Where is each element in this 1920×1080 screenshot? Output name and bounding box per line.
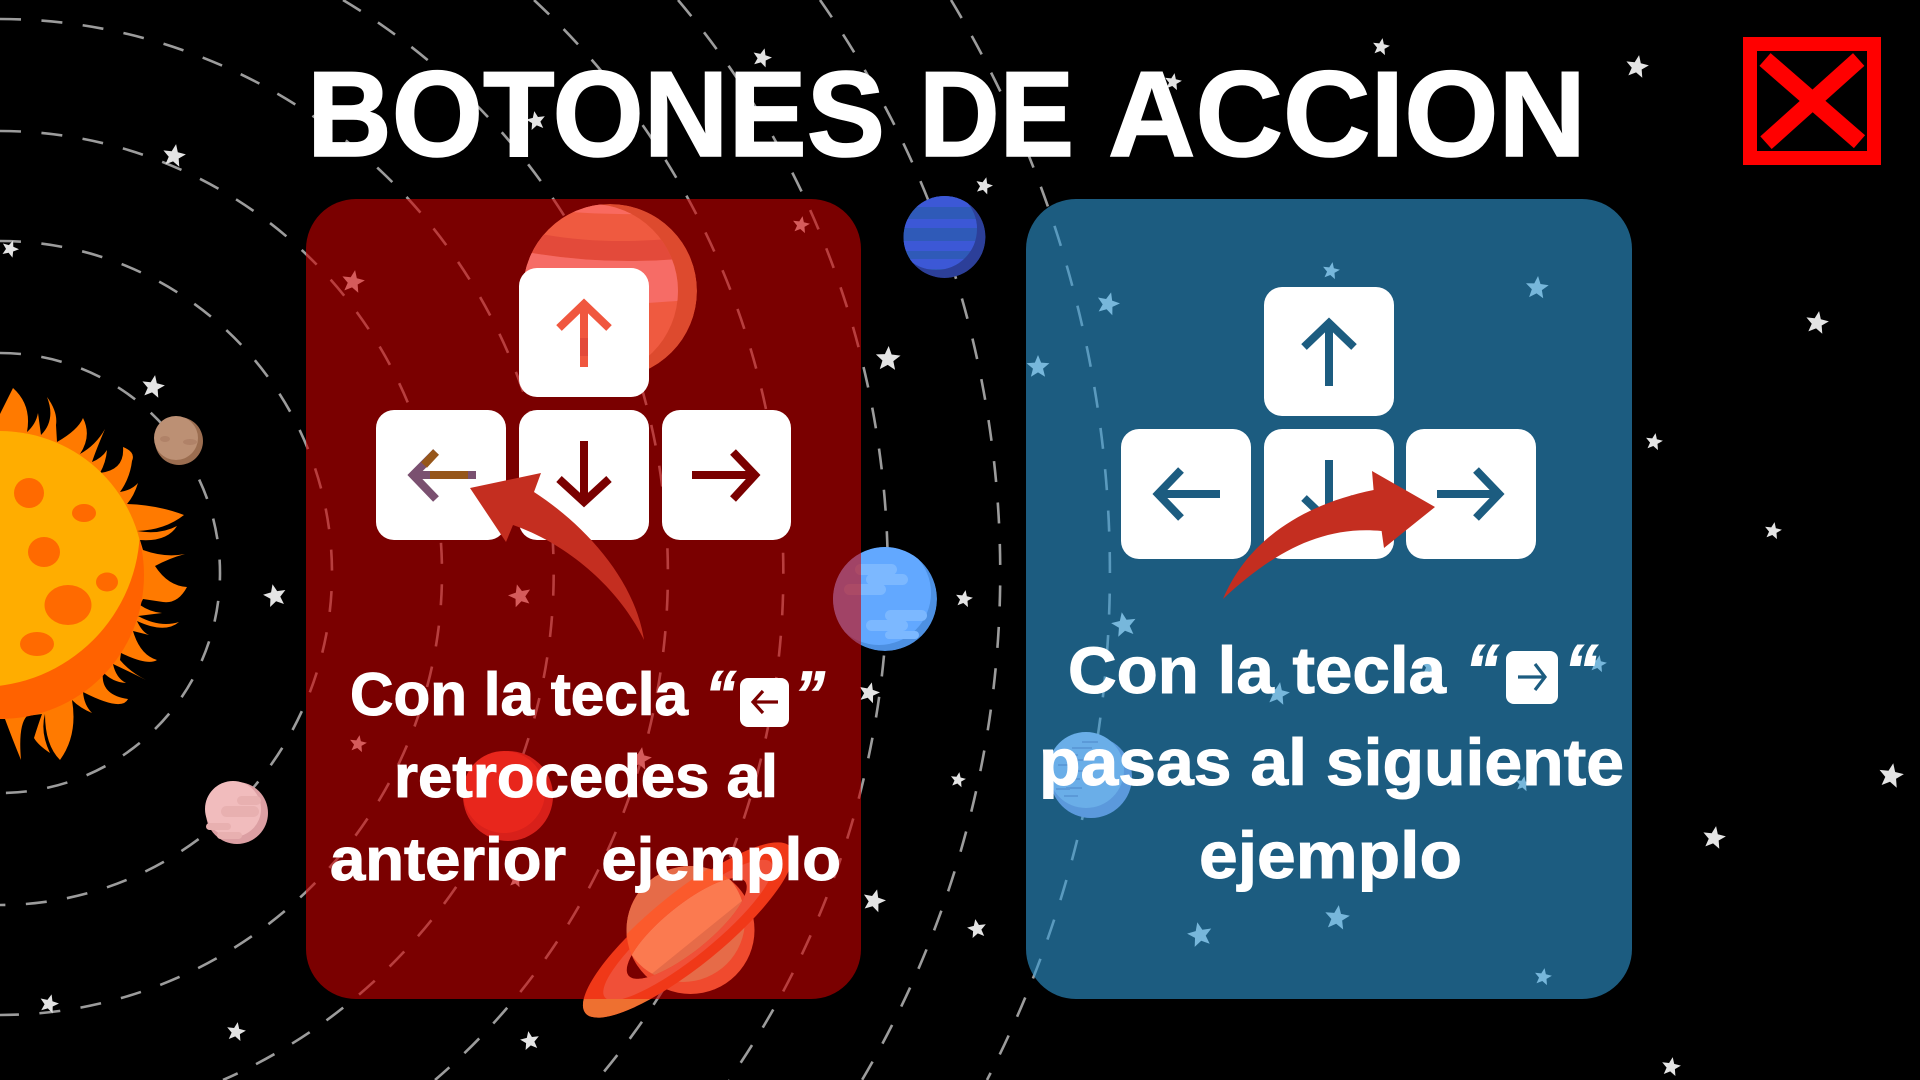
icon: close button — [1750, 44, 1874, 158]
planet: brown — [154, 416, 203, 465]
planet: light blue — [1048, 732, 1132, 818]
key: down — [1264, 429, 1394, 559]
ring — [563, 819, 813, 1041]
text: red panel: “ — [705, 657, 736, 731]
text: red panel: retrocedes al — [394, 743, 778, 810]
text: red panel: Con la tecla — [350, 661, 689, 728]
ring: part below panel — [582, 999, 650, 1018]
key: left — [376, 410, 506, 540]
arrow: curved right — [1223, 471, 1435, 599]
planet: small red — [463, 751, 553, 841]
text: red panel: anterior ejemplo — [330, 826, 841, 893]
keys: blue panel — [1121, 287, 1536, 559]
text: blue panel: “ — [1465, 631, 1499, 711]
text: blue panel: ejemplo — [1199, 818, 1462, 892]
title: BOTONES — [307, 46, 885, 182]
planet: orange banded — [524, 204, 697, 368]
text: blue panel: “ — [1564, 631, 1598, 711]
body — [626, 866, 754, 994]
sun — [0, 367, 187, 760]
text: blue panel — [1039, 631, 1624, 892]
planet: navy — [904, 196, 986, 278]
icon: small left key — [740, 678, 789, 727]
text: red panel: ” — [794, 657, 825, 731]
text: blue panel: Con la tecla — [1068, 633, 1447, 707]
title: DE — [919, 46, 1074, 182]
key: right — [662, 410, 791, 540]
key: up — [519, 268, 649, 397]
planet: ringed — [582, 842, 788, 1018]
orbits — [0, 0, 1110, 1080]
text: blue panel: pasas al siguiente — [1039, 725, 1624, 799]
arrow: curved left — [470, 473, 644, 640]
panel: red — [306, 199, 861, 999]
key: left — [1121, 429, 1251, 559]
ring: upper arc over body — [626, 868, 728, 954]
title — [307, 46, 1586, 182]
key: up — [1264, 287, 1394, 416]
text: red panel — [330, 657, 841, 893]
planet: pink — [205, 781, 268, 844]
planet: blue — [833, 547, 937, 651]
panel: blue — [1026, 199, 1632, 999]
key: right — [1406, 429, 1536, 559]
keys: red panel — [376, 268, 791, 540]
icon: small right key — [1506, 651, 1558, 704]
title: ACCION — [1108, 46, 1586, 182]
key: down — [519, 410, 649, 540]
